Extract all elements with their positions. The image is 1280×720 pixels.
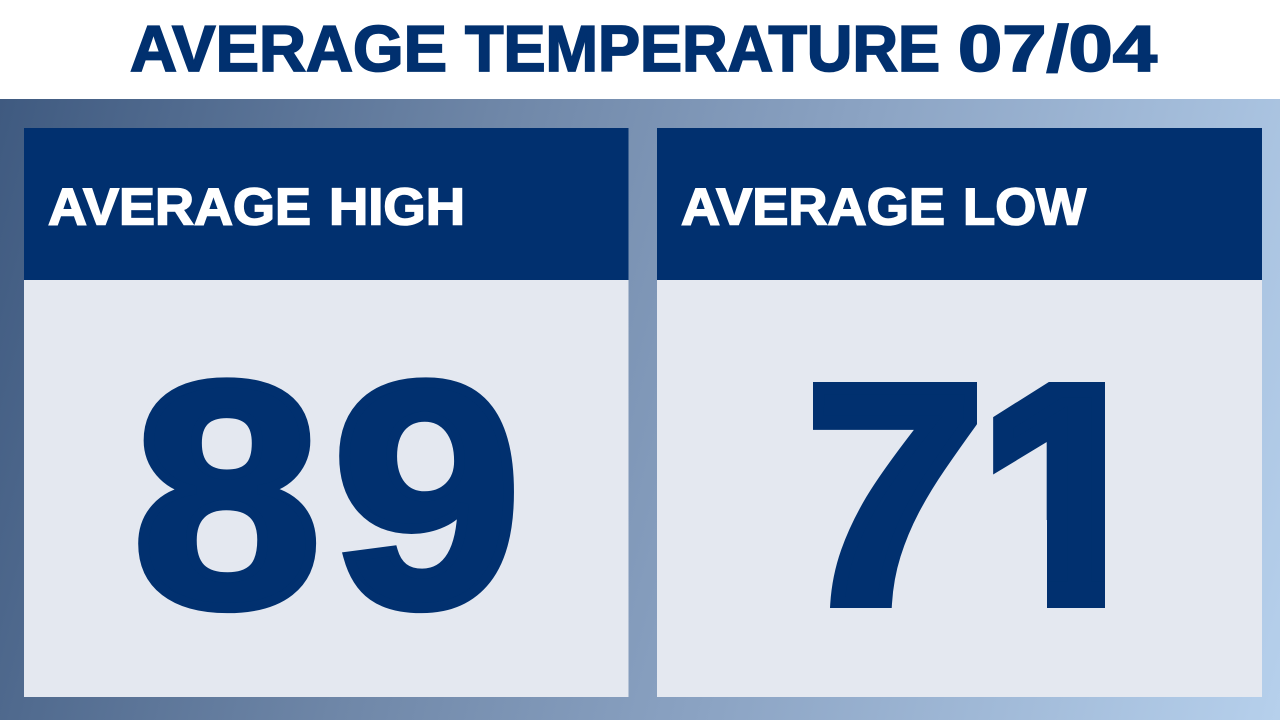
panel: average low: [657, 128, 1262, 697]
heading: average high: AVERAGE: [48, 178, 311, 236]
number: 89: 9: [333, 316, 521, 673]
number: 71: 7: [786, 320, 991, 671]
panel background: [24, 128, 628, 697]
number: 89: [133, 316, 521, 673]
heading: average low: LOW: [963, 178, 1087, 236]
number: 71: [813, 382, 1105, 608]
heading: average low: AVERAGE: [681, 178, 945, 236]
title: AVERAGE: [130, 12, 447, 85]
number: 71: 1: [981, 319, 1162, 671]
title: [130, 12, 1157, 85]
panel background: [657, 128, 1262, 697]
heading: average low: [657, 128, 1262, 280]
heading: average high: [24, 128, 628, 280]
heading: average high: HIGH: [329, 178, 465, 236]
title: 07/04: [958, 12, 1157, 85]
title: TEMPERATURE: [465, 12, 940, 85]
panel: average high: [24, 128, 628, 697]
number: 89: 8: [133, 316, 321, 673]
